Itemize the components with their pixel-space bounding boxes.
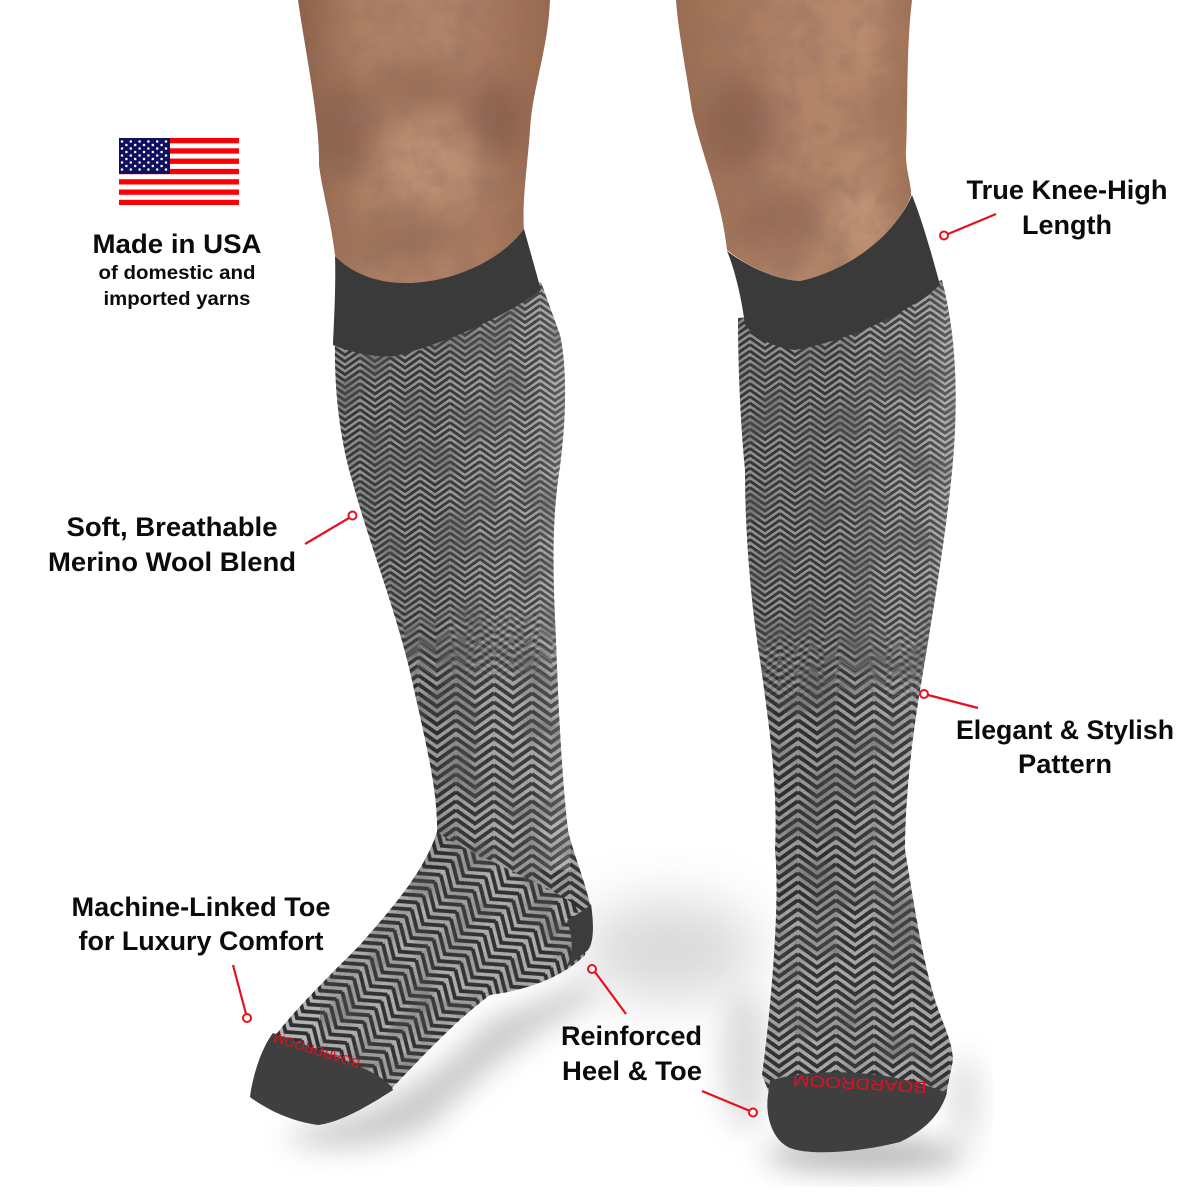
text: Made in USA: Made in USA <box>92 229 262 259</box>
left cuff <box>333 229 541 356</box>
callout: Elegant & Stylish Pattern <box>920 690 1174 779</box>
right leg <box>670 0 970 1152</box>
callout: True Knee-High Length: Length <box>1022 210 1112 240</box>
callout: Elegant & Stylish Pattern: Pattern <box>1018 749 1112 779</box>
left sock shading <box>330 270 570 870</box>
right sock shading <box>735 270 957 910</box>
right knee skin <box>670 0 920 290</box>
right cuff <box>727 195 940 350</box>
left sock body <box>277 282 590 1088</box>
left leg <box>250 0 600 1125</box>
callout: Soft, Breathable Merino Wool Blend: Soft, Breathable <box>66 512 278 542</box>
left knee skin <box>290 0 560 290</box>
callout: True Knee-High Length <box>940 175 1168 240</box>
callout: Soft, Breathable Merino Wool Blend <box>48 512 356 577</box>
callout: True Knee-High Length: True Knee-High <box>966 175 1168 205</box>
right toe logo: BOARDROOM <box>793 1071 927 1095</box>
callout: Reinforced Heel & Toe <box>561 965 757 1116</box>
callout: Machine-Linked Toe for Luxury Comfort <box>72 892 330 1022</box>
left foot pattern <box>277 832 586 1088</box>
callout: Elegant & Stylish Pattern: Elegant & Stylish <box>956 715 1174 745</box>
floor shadows <box>285 900 979 1171</box>
right toe patch <box>767 1072 947 1152</box>
right sock body <box>738 280 956 1093</box>
callout: Reinforced Heel & Toe: Heel & Toe <box>562 1056 702 1086</box>
left toe logo: BOARDROOM <box>272 1030 362 1071</box>
icon: American flag <box>119 138 239 205</box>
text: Made in USA: of domestic and <box>98 262 256 284</box>
text: Made in USA <box>92 229 262 310</box>
left toe patch <box>250 1033 393 1125</box>
text: Made in USA: imported yarns <box>104 288 251 310</box>
left heel patch <box>566 904 593 968</box>
callout: Soft, Breathable Merino Wool Blend: Merino Wool Blend <box>48 547 296 577</box>
callout: Reinforced Heel & Toe: Reinforced <box>561 1021 702 1051</box>
callout: Machine-Linked Toe for Luxury Comfort: for Luxury Comfort <box>78 926 324 956</box>
callout: Machine-Linked Toe for Luxury Comfort: Machine-Linked Toe <box>72 892 330 922</box>
